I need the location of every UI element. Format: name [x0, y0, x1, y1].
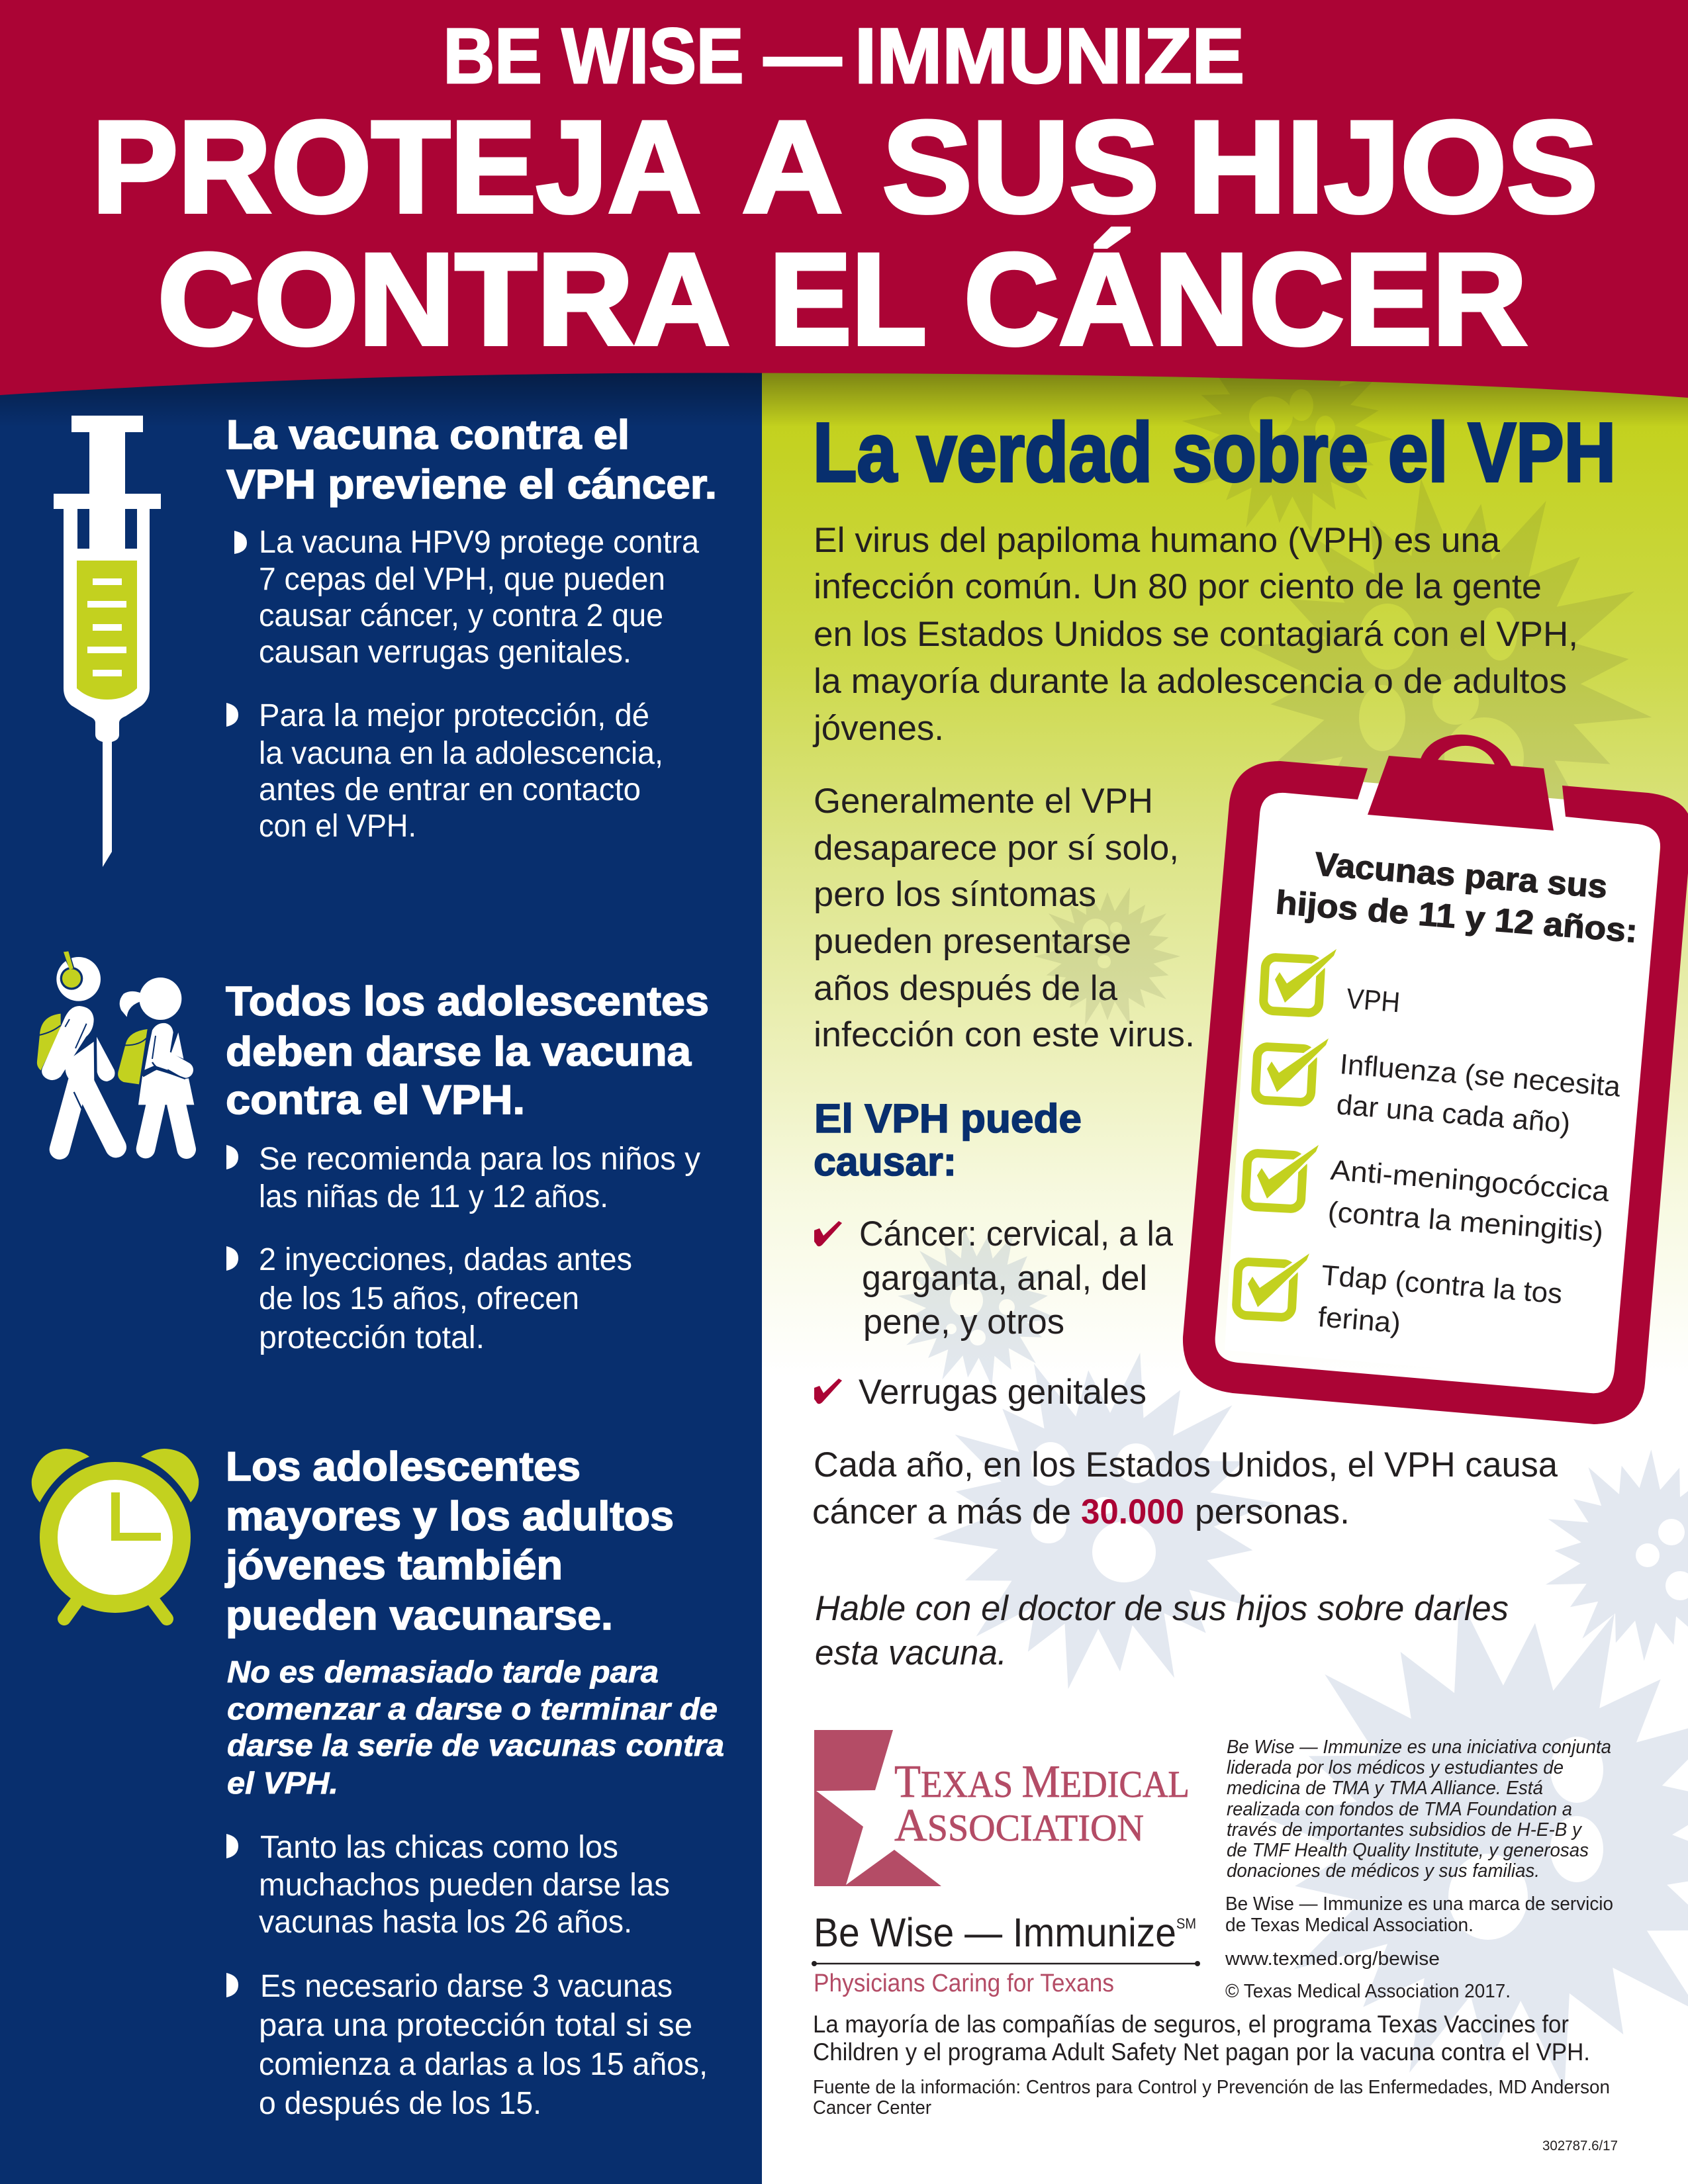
text: initiative credits: Be Wise — Immunize es una iniciativa conjunta [1227, 1737, 1611, 1758]
italic statement: darse la serie de vacunas contra [227, 1728, 724, 1762]
clipboard heading: hijos de 11 y 12 años: [1274, 884, 1639, 950]
text: second paragraph: Generalmente el VPH [814, 782, 1153, 821]
text: source: Fuente de la información: Centros para Control y Prevención de las Enfermedades, MD Anderson [813, 2077, 1610, 2098]
title: A [742, 94, 843, 240]
bullet: HPV9: La vacuna HPV9 protege contra [259, 525, 699, 560]
virus decorations [887, 321, 1688, 2107]
text: source [813, 2077, 1610, 2118]
bullet: two injections: de los 15 años, ofrecen [259, 1281, 579, 1316]
title: CÁNCER [964, 226, 1527, 372]
clipboard heading: Vacunas para sus [1313, 845, 1609, 905]
checkbox: meningococcal: Anti-meningocóccica [1329, 1154, 1611, 1208]
icon: alarm clock [32, 1449, 199, 1619]
checkbox: influenza: Influenza (se necesita [1338, 1048, 1622, 1103]
bullet: two injections: protección total. [259, 1320, 485, 1355]
checkbox: Tdap: ferina) [1317, 1301, 1402, 1340]
bullet: until 26 [226, 1830, 670, 1940]
text: initiative credits: de Texas Medical Association. [1225, 1915, 1474, 1936]
boy [37, 951, 116, 1150]
text: second paragraph: pero los síntomas [814, 875, 1096, 914]
text: insurance note [813, 2011, 1590, 2066]
panel: left blue column [0, 371, 762, 2184]
bullet: three vaccines: para una protección total si se [259, 2008, 692, 2043]
checkbox: Tdap: Tdap (contra la tos [1320, 1259, 1564, 1310]
text: initiative credits: medicina de TMA y TMA Alliance. Está [1227, 1778, 1543, 1799]
panel: right background [762, 321, 1688, 2184]
text: initiative credits [1225, 1737, 1613, 2002]
text: initiative credits: Be Wise — Immunize es una marca de servicio [1225, 1893, 1613, 1915]
text: second paragraph: infección con este virus. [814, 1015, 1195, 1054]
bullet: ages 11 and 12: las niñas de 11 y 12 años. [259, 1179, 608, 1214]
text: initiative credits: realizada con fondos de TMA Foundation a [1227, 1799, 1572, 1820]
italic statement: No es demasiado tarde para [227, 1655, 659, 1689]
title: BE WISE [444, 13, 744, 100]
clipboard heading [1274, 845, 1639, 950]
text: initiative credits: través de importantes subsidios de H-E-B y [1227, 1819, 1582, 1841]
text: document code: 302787.6/17 [1542, 2138, 1618, 2154]
section: older teens and young adults [225, 1444, 724, 2121]
bullet: until 26: Tanto las chicas como los [260, 1830, 618, 1865]
title: HIJOS [1188, 94, 1598, 240]
banner shadow [0, 371, 1688, 427]
text: second paragraph: desaparece por sí solo, [814, 829, 1179, 868]
logo: Be Wise Immunize [812, 1910, 1200, 1997]
heading: contra el VPH. [226, 1077, 525, 1123]
heading: deben darse la vacuna [226, 1029, 692, 1075]
italic statement [227, 1655, 724, 1800]
text: second paragraph [814, 782, 1195, 1054]
text: insurance note: La mayoría de las compañías de seguros, el programa Texas Vaccines for [813, 2011, 1569, 2038]
list: conditions: Cáncer: cervical, a la [859, 1214, 1173, 1253]
title: CONTRA [158, 226, 730, 372]
heading [226, 979, 709, 1123]
clip [1368, 735, 1554, 831]
heading: jóvenes también [225, 1543, 563, 1588]
title: SUS [882, 94, 1159, 240]
heading [225, 1444, 674, 1639]
text: 30,000 people statistic: cáncer a más de [812, 1492, 1071, 1531]
checkbox: VPH [1263, 949, 1401, 1019]
heading: Todos los adolescentes [226, 979, 709, 1024]
text: 30,000 people statistic: personas. [1195, 1492, 1350, 1531]
list: conditions: Verrugas genitales [859, 1373, 1147, 1412]
text: talk to the doctor [815, 1589, 1509, 1672]
text: insurance note: Children y el programa Adult Safety Net pagan por la vacuna contra el VPH. [813, 2038, 1590, 2066]
icon: syringe [54, 416, 161, 867]
bullet: HPV9: causan verrugas genitales. [259, 635, 632, 670]
text: 30,000 people statistic [812, 1445, 1558, 1531]
title [92, 13, 1598, 372]
logo: Be Wise Immunize: SM [1176, 1915, 1196, 1932]
bullet: best protection [226, 698, 663, 844]
checkbox: meningococcal: (contra la meningitis) [1327, 1196, 1605, 1248]
panel: clipboard [1183, 735, 1688, 1424]
text: intro paragraph: El virus del papiloma humano (VPH) es una [814, 521, 1501, 560]
text: intro paragraph: infección común. Un 80 por ciento de la gente [814, 567, 1542, 606]
checkbox: VPH: VPH [1345, 983, 1401, 1019]
text: intro paragraph: la mayoría durante la adolescencia o de adultos [814, 662, 1567, 701]
girl [118, 978, 194, 1150]
bullet: HPV9: 7 cepas del VPH, que pueden [259, 562, 665, 597]
subheading: el VPH puede causar: causar: [814, 1139, 957, 1184]
logo: Be Wise Immunize: Be Wise — Immunize [814, 1910, 1176, 1955]
text: initiative credits: donaciones de médicos y sus familias. [1227, 1860, 1540, 1882]
logo: Texas Medical Association: TEXAS MEDICAL [894, 1756, 1190, 1807]
bullet: ages 11 and 12: Se recomienda para los niños y [259, 1142, 700, 1177]
checkbox: meningococcal [1245, 1145, 1611, 1248]
text: intro paragraph [812, 521, 1578, 748]
checkbox: influenza [1255, 1038, 1622, 1140]
heading: VPH previene el cáncer. [226, 462, 717, 508]
text: intro paragraph: jóvenes. [812, 709, 944, 748]
bullet: three vaccines: o después de los 15. [259, 2086, 541, 2121]
text: initiative credits: © Texas Medical Association 2017. [1225, 1981, 1511, 2002]
list: conditions: pene, y otros [863, 1302, 1064, 1342]
title: EL [769, 226, 927, 372]
list: conditions: garganta, anal, del [862, 1259, 1147, 1298]
subheading: el VPH puede causar [814, 1096, 1082, 1184]
logo: Texas Medical Association [814, 1730, 1190, 1886]
checkbox: influenza: dar una cada año) [1335, 1089, 1571, 1140]
title: PROTEJA [92, 94, 701, 240]
text: intro paragraph: en los Estados Unidos se contagiará con el VPH, [814, 615, 1578, 654]
logo: Be Wise Immunize: Physicians Caring for Texans [814, 1970, 1114, 1997]
section: all adolescents [226, 979, 709, 1355]
subheading: el VPH puede causar: El VPH puede [814, 1096, 1082, 1141]
bullet: best protection: la vacuna en la adolescencia, [259, 736, 663, 771]
text: initiative credits: liderada por los médicos y estudiantes de [1227, 1757, 1564, 1778]
title: — [764, 13, 841, 100]
bullet: three vaccines: comienza a darlas a los 15 años, [259, 2047, 708, 2082]
text: second paragraph: pueden presentarse [814, 922, 1131, 961]
italic statement: comenzar a darse o terminar de [227, 1692, 718, 1726]
text: initiative credits: de TMF Health Quality Institute, y generosas [1227, 1840, 1589, 1861]
heading: La vacuna contra el [226, 412, 630, 458]
logo: Texas Medical Association: ASSOCIATION [894, 1800, 1144, 1851]
bullet: three vaccines: Es necesario darse 3 vacunas [260, 1969, 673, 2004]
section: vaccine prevents cancer [226, 412, 717, 844]
text: second paragraph: años después de la [814, 969, 1118, 1008]
heading: mayores y los adultos [226, 1494, 674, 1539]
bullet: two injections: 2 inyecciones, dadas antes [259, 1242, 632, 1277]
text: source: Cancer Center [813, 2097, 931, 2118]
text: 30,000 people statistic: Cada año, en los Estados Unidos, el VPH causa [814, 1445, 1558, 1484]
bullet: until 26: muchachos pueden darse las [259, 1868, 670, 1903]
bullet: best protection: Para la mejor protección, dé [259, 698, 649, 733]
heading [226, 412, 717, 508]
bullet: three vaccines [226, 1969, 708, 2121]
title: IMMUNIZE [855, 13, 1244, 100]
text: initiative credits: www.texmed.org/bewise [1225, 1948, 1440, 1970]
icon: teens walking [37, 951, 194, 1150]
bullet: HPV9 [234, 525, 699, 670]
text: 30,000 people statistic: 30.000 [1081, 1492, 1184, 1531]
list: conditions [814, 1214, 1173, 1412]
bullet: best protection: antes de entrar en contacto [259, 772, 641, 807]
italic statement: el VPH. [227, 1766, 338, 1800]
heading: Los adolescentes [226, 1444, 581, 1490]
heading: pueden vacunarse. [226, 1593, 613, 1639]
text: talk to the doctor: esta vacuna. [815, 1633, 1007, 1672]
text: talk to the doctor: Hable con el doctor de sus hijos sobre darles [815, 1589, 1509, 1628]
bullet: best protection: con el VPH. [259, 809, 416, 844]
bullet: until 26: vacunas hasta los 26 años. [259, 1905, 632, 1940]
bullet: HPV9: causar cáncer, y contra 2 que [259, 598, 663, 633]
bullet: two injections [226, 1242, 632, 1355]
checkbox: Tdap [1236, 1253, 1564, 1340]
banner: title background [0, 0, 1688, 398]
bullet: ages 11 and 12 [226, 1142, 700, 1214]
